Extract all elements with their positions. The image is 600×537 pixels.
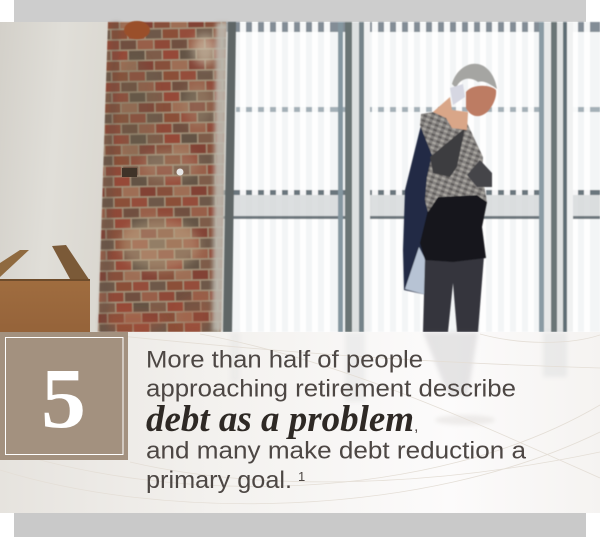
- sleeve left arm: [430, 128, 465, 177]
- wall: [0, 22, 109, 332]
- number 5: 5: [41, 350, 86, 446]
- scarf: [403, 125, 434, 295]
- sleeve right arm: [467, 160, 492, 187]
- horizontal window rail: [222, 195, 600, 216]
- statement text: debt as a problem: [146, 399, 414, 440]
- patterned top: [420, 112, 487, 212]
- statement text: approaching retirement describe: [146, 376, 516, 402]
- phone: [450, 84, 465, 105]
- bottom grey band: [14, 513, 586, 537]
- concrete edge of pillar: [212, 22, 228, 332]
- statement text: ,: [414, 418, 418, 435]
- brick pillar: [98, 21, 236, 333]
- hair: [452, 64, 497, 89]
- number badge: [0, 332, 128, 460]
- face: [466, 86, 496, 116]
- statement text: More than half of people: [146, 346, 423, 374]
- faded reflection: [230, 332, 567, 425]
- skirt: [420, 195, 487, 262]
- window pillar right: [539, 22, 573, 332]
- photo: woman on phone in a loft: [0, 21, 600, 333]
- statement text: 1: [298, 469, 305, 484]
- window frame: [223, 22, 236, 332]
- statement text: [146, 346, 526, 494]
- statement text: primary goal.: [146, 467, 292, 494]
- statement text: and many make debt reduction a: [146, 438, 526, 464]
- neck and hand: [433, 97, 468, 130]
- window with blinds: [222, 22, 600, 332]
- cardboard box: [0, 245, 90, 332]
- lower text panel background: [0, 332, 600, 513]
- top grey band: [14, 0, 586, 22]
- legs: [423, 256, 484, 332]
- woman: [403, 64, 497, 332]
- window pillar left: [338, 22, 370, 332]
